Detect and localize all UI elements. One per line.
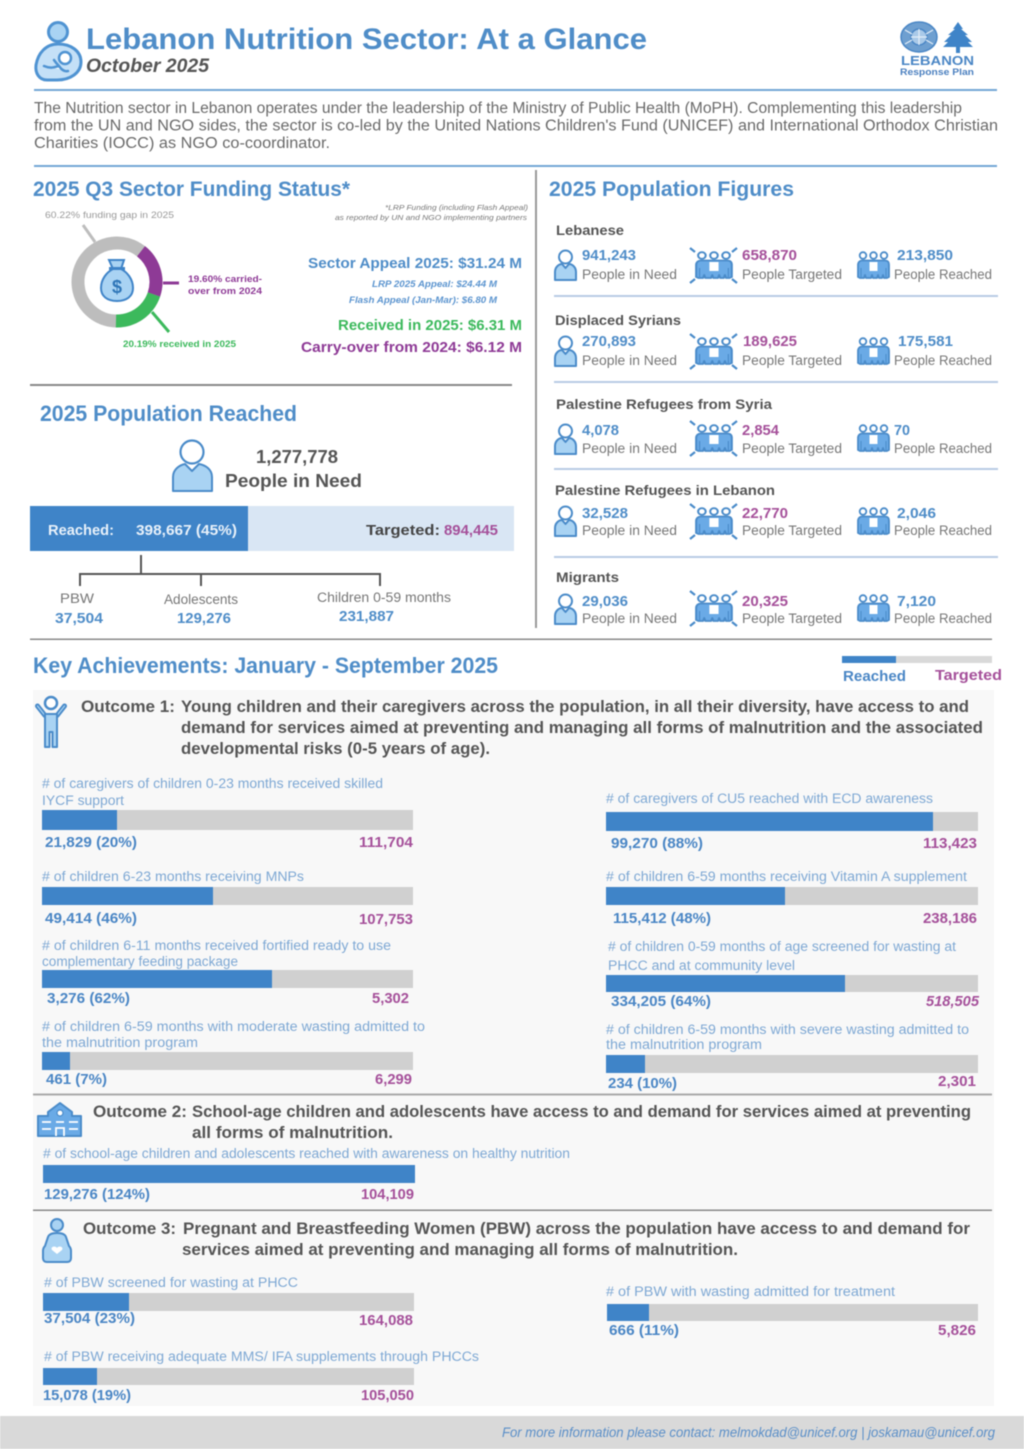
intro paragraph [34,100,998,152]
outcome 2 statement: all forms of malnutrition. [192,1124,393,1142]
donut chart [62,225,179,337]
funding figures: Flash Appeal (Jan-Mar): $6.80 M [349,295,498,305]
indicator: wasting screening: PHCC and at community level [608,958,795,973]
outcome 1 statement: Outcome 1: [81,698,175,716]
heading: key achievements: Key Achievements: January - September 2025 [33,653,498,678]
indicator: fortified food: 3,276 (62%) [47,991,130,1007]
title: Lebanon Nutrition Sector: At a Glance [86,23,647,56]
outcome 2 statement [93,1103,971,1142]
icon: school [38,1103,81,1136]
group: Migrants: Migrants [556,569,619,585]
indicator: MNPs: # of children 6-23 months receiving MNPs [42,869,304,884]
group: Palestine Refugees from Syria: People Targeted [742,441,842,456]
indicator: PBW MMS/IFA [43,1349,479,1404]
group: Palestine Refugees in Lebanon: People Targeted [742,523,842,538]
received label: 20.19% received in 2025 [123,339,237,350]
legend: Reached [843,669,906,685]
group: Palestine Refugees in Lebanon: Palestine Refugees in Lebanon [555,482,775,498]
group: Displaced Syrians: 175,581 [898,334,953,350]
indicator: PBW MMS/IFA: # of PBW receiving adequate MMS/ IFA supplements through PHCCs [44,1349,479,1364]
group: Lebanese: 941,243 [582,248,636,264]
indicator: caregivers IYCF: # of caregivers of children 0-23 months received skilled [42,776,383,791]
indicator: caregivers IYCF [42,776,413,851]
breakdown: PBW: PBW [60,591,94,606]
indicator: PBW screened: 37,504 (23%) [44,1311,135,1327]
legend [842,656,1002,685]
indicator: fortified food: 5,302 [372,991,409,1007]
group: Palestine Refugees in Lebanon: 22,770 [742,506,788,522]
panel: funding status [33,178,528,356]
indicator: caregivers IYCF: IYCF support [42,793,124,808]
funding gap label: 60.22% funding gap in 2025 [45,210,174,220]
legend: Targeted [935,668,1002,684]
indicator: fortified food: complementary feeding package [42,954,238,969]
intro paragraph: The Nutrition sector in Lebanon operates under the leadership of the Ministry of Public Health (MoPH). Complementing this leadership [34,100,962,117]
intro paragraph: Charities (IOCC) as NGO co-coordinator. [34,135,330,152]
indicator: vitamin A [606,869,978,927]
outcome 2 [38,1103,971,1203]
breakdown: adolescents: Adolescents [164,592,238,607]
group: Lebanese: People Reached [894,267,992,282]
group: Palestine Refugees from Syria [555,396,992,456]
indicator: severe wasting [606,1022,978,1092]
intro paragraph: from the UN and NGO sides, the sector is co-led by the United Nations Children's Fund (UNICEF) and International Orthodox Christian [34,118,998,134]
header icon: mother and baby [36,22,81,80]
indicator: severe wasting: 234 (10%) [608,1076,677,1092]
indicator: moderate wasting: the malnutrition program [42,1035,198,1050]
breakdown: children: 231,887 [339,609,394,625]
people in need: People in Need [225,471,362,491]
outcome 1 statement: developmental risks (0-5 years of age). [181,740,490,758]
indicator: PBW screened: 164,088 [359,1313,413,1329]
indicator: PBW wasting treatment [606,1284,978,1339]
footnote: *LRP Funding (including Flash Appeal) [385,205,528,212]
group: Palestine Refugees in Lebanon: 2,046 [897,506,936,522]
breakdown tree [80,555,380,586]
outcome 1 [38,697,983,1092]
indicator: PBW screened: # of PBW screened for wasting at PHCC [44,1275,298,1290]
indicator: fortified food [42,938,413,1007]
funding figures: Sector Appeal 2025: $31.24 M [308,255,522,272]
group: Displaced Syrians: Displaced Syrians [555,312,681,328]
outcome 3 statement [83,1220,971,1259]
indicator: wasting screening: # of children 0-59 months of age screened for wasting at [608,939,956,954]
group: Palestine Refugees from Syria: 4,078 [582,423,619,439]
funding figures: Received in 2025: $6.31 M [338,317,522,334]
indicator: ECD awareness: 113,423 [923,836,977,852]
icon: money bag: $ [112,277,122,297]
indicator: fortified food: # of children 6-11 months received fortified ready to use [42,938,391,953]
outcome 3 statement: Outcome 3: [83,1220,176,1238]
indicator: ECD awareness [606,791,978,852]
indicator: MNPs: 49,414 (46%) [45,911,137,927]
group: Palestine Refugees in Lebanon: 32,528 [582,506,628,522]
group: Lebanese [555,222,992,283]
group: Palestine Refugees from Syria: People Reached [894,441,992,456]
group: Migrants: 7,120 [897,594,936,610]
heading: funding: 2025 Q3 Sector Funding Status* [33,178,351,201]
group: Lebanese: 213,850 [897,248,953,264]
outcome 1 statement: Young children and their caregivers across the population, in all their diversity, have access to and [181,698,969,716]
indicator: moderate wasting [42,1019,425,1088]
indicator: PBW wasting treatment: # of PBW with wasting admitted for treatment [606,1284,895,1299]
indicator: caregivers IYCF: 21,829 (20%) [45,835,137,851]
group: Migrants [555,569,992,626]
group: Palestine Refugees from Syria: People in Need [582,441,677,456]
group: Palestine Refugees in Lebanon: People Reached [894,523,992,538]
indicator: wasting screening: 334,205 (64%) [611,994,711,1010]
group: Migrants: 29,036 [582,594,628,610]
group: Migrants: People Targeted [742,611,842,626]
indicator: school-age awareness: 104,109 [361,1187,414,1203]
funding figures [301,255,522,356]
heading: population figures: 2025 Population Figures [549,178,794,201]
group: Displaced Syrians: 270,893 [582,334,636,350]
indicator: caregivers IYCF: 111,704 [359,835,413,851]
reached vs targeted bar: Targeted: [366,523,440,539]
indicator: school-age awareness: 129,276 (124%) [44,1187,150,1203]
breakdown: children [317,590,451,625]
reached vs targeted bar: 894,445 [444,523,498,539]
indicator: PBW wasting treatment: 666 (11%) [609,1323,679,1339]
carry-over label [188,274,263,297]
outcome 1 statement [81,698,983,758]
group: Palestine Refugees in Lebanon [555,482,992,539]
indicator: PBW screened [43,1275,414,1329]
group: Displaced Syrians: 189,625 [743,334,797,350]
carry-over label: 19.60% carried- [188,274,262,285]
group: Lebanese: Lebanese [556,222,624,238]
breakdown: PBW [55,591,103,627]
group: Migrants: People in Need [582,611,677,626]
footnote [335,205,528,222]
panel: population reached [30,401,514,627]
breakdown: adolescents [164,592,238,627]
indicator: ECD awareness: # of caregivers of CU5 reached with ECD awareness [606,791,933,806]
footer [0,1416,1024,1449]
group: Lebanese: People in Need [582,267,677,282]
indicator: MNPs: 107,753 [359,912,413,928]
logo: Lebanon Response Plan: LEBANON [901,53,974,68]
outcome 3 statement: Pregnant and Breastfeeding Women (PBW) across the population have access to and demand for [183,1220,971,1238]
indicator: PBW MMS/IFA: 105,050 [361,1388,414,1404]
footnote: as reported by UN and NGO implementing partners [335,215,528,222]
indicator: PBW wasting treatment: 5,826 [938,1323,976,1339]
icon: person [173,440,212,491]
outcome 3 statement: services aimed at preventing and managing all forms of malnutrition. [182,1241,738,1259]
group: Migrants: 20,325 [742,594,788,610]
group: Palestine Refugees from Syria: 2,854 [742,423,779,439]
reached vs targeted bar: 398,667 (45%) [136,523,237,539]
logo: Lebanon Response Plan [900,22,974,77]
group: Palestine Refugees in Lebanon: People in Need [582,523,677,538]
breakdown: PBW: 37,504 [55,611,103,627]
group: Displaced Syrians: People in Need [582,353,677,368]
breakdown: children: Children 0-59 months [317,590,451,605]
footer: For more information please contact: melmokdad@unicef.org | joskamau@unicef.org [502,1424,995,1440]
indicator: severe wasting: 2,301 [938,1074,976,1090]
heading: population reached: 2025 Population Reached [40,401,297,426]
people in need: 1,277,778 [256,447,338,467]
group: Lebanese: 658,870 [742,248,797,264]
indicator: moderate wasting: 461 (7%) [46,1072,107,1088]
outcome 2 statement: Outcome 2: [93,1103,187,1121]
breakdown: adolescents: 129,276 [177,611,231,627]
indicator: school-age awareness: # of school-age children and adolescents reached with awareness on healthy nutrition [43,1146,570,1161]
indicator: moderate wasting: # of children 6-59 months with moderate wasting admitted to [42,1019,425,1034]
funding figures: LRP 2025 Appeal: $24.44 M [372,279,498,289]
indicator: wasting screening: 518,505 [926,994,980,1010]
indicator: school-age awareness [43,1146,570,1203]
indicator: vitamin A: # of children 6-59 months receiving Vitamin A supplement [606,869,967,884]
indicator: severe wasting: # of children 6-59 months with severe wasting admitted to [606,1022,969,1037]
indicator: moderate wasting: 6,299 [375,1072,412,1088]
group: Palestine Refugees from Syria: Palestine Refugees from Syria [556,396,772,412]
group: Palestine Refugees from Syria: 70 [894,423,910,439]
reached vs targeted bar: Reached: [48,523,114,539]
group: Lebanese: People Targeted [742,267,842,282]
outcome 3 [43,1219,978,1404]
panel: population figures [549,178,998,626]
indicator: MNPs [42,869,413,928]
subtitle date: October 2025 [86,56,209,77]
outcome 2 statement: School-age children and adolescents have access to and demand for services aimed at preventing [192,1103,971,1121]
icon: child [38,697,64,747]
logo: Lebanon Response Plan: Response Plan [900,67,974,77]
icon: pregnant woman [43,1219,71,1262]
group: Displaced Syrians [555,312,992,369]
carry-over label: over from 2024 [188,286,263,297]
people in need [225,447,362,491]
indicator: PBW MMS/IFA: 15,078 (19%) [43,1388,131,1404]
indicator: ECD awareness: 99,270 (88%) [611,836,703,852]
indicator: vitamin A: 115,412 (48%) [613,911,711,927]
reached vs targeted bar [30,506,514,551]
panel: achievements background [33,690,994,1406]
funding figures: Carry-over from 2024: $6.12 M [301,339,522,356]
group: Displaced Syrians: People Reached [894,353,992,368]
group: Migrants: People Reached [894,611,992,626]
indicator: severe wasting: the malnutrition program [606,1037,762,1052]
indicator: wasting screening [606,939,980,1010]
outcome 1 statement: demand for services aimed at preventing and managing all forms of malnutrition and the associated [181,719,983,737]
indicator: vitamin A: 238,186 [923,911,977,927]
group: Displaced Syrians: People Targeted [742,353,842,368]
